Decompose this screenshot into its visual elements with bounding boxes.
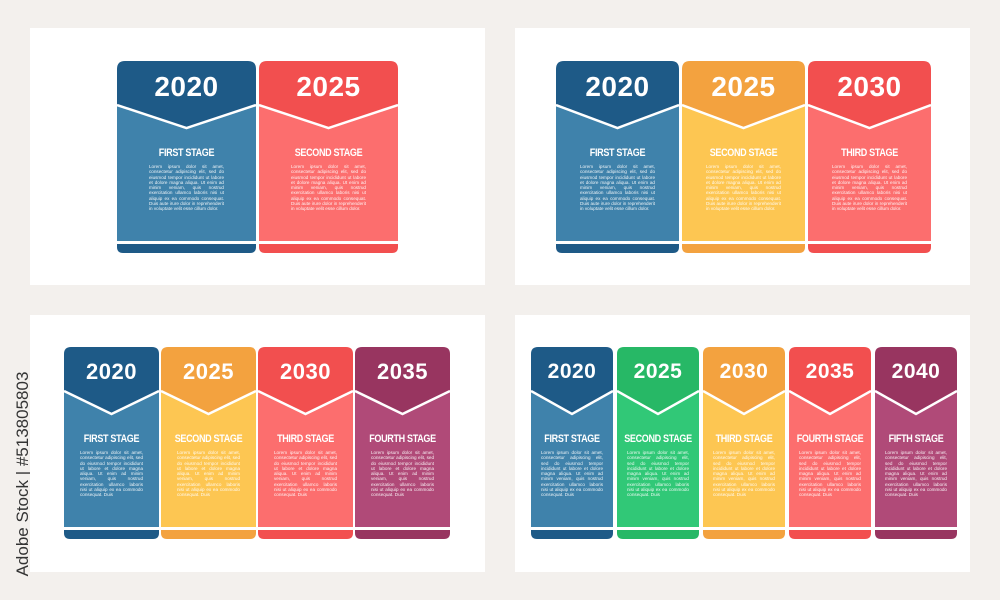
column: 2030 third stage: Lorem ipsum dolor sit amet, consectetur adipiscing elit, sed do eiusmod tempor incididunt ut labore et dolore magna aliqua. Ut enim ad minim veniam, quis nostrud exercitation ullamco laboris nisi ut aliquip ex ea commodo consequat. Duis [713,450,775,497]
column: 2020 first stage: 2020 [585,71,650,102]
column: 2025 second stage: Lorem ipsum dolor sit amet, consectetur adipiscing elit, sed do eiusmod tempor incididunt ut labore et dolore magna aliqua. Ut enim ad minim veniam, quis nostrud exercitation ullamco laboris nisi ut aliquip ex ea commodo consequat. Duis [627,450,689,497]
column: 2030 third stage: THIRD STAGE [841,147,898,159]
column: 2020 first stage: Lorem ipsum dolor sit amet, consectetur adipiscing elit, sed do eiusmod tempor incididunt ut labore et dolore magna aliqua. Ut enim ad minim veniam, quis nostrud exercitation ullamco laboris nisi ut aliquip ex ea commodo consequat. Duis [541,450,603,497]
column: 2020 first stage: FIRST STAGE [84,433,139,445]
column: 2025 second stage: 2025 [296,71,361,102]
column: 2030 third stage: THIRD STAGE [716,433,772,445]
column: 2020 first stage: 2020 [154,71,219,102]
column: 2025 second stage [259,61,398,253]
column: 2025 second stage [682,61,805,253]
column: 2035 fourth stage: FOURTH STAGE [369,433,436,445]
panel: three stages [515,28,970,285]
column: 2040 fifth stage: FIFTH STAGE [889,433,943,445]
column: 2025 second stage: 2025 [634,360,682,383]
column: 2030 third stage: THIRD STAGE [277,433,334,445]
column: 2020 first stage [64,347,159,539]
column: 2020 first stage: FIRST STAGE [544,433,600,445]
column: 2020 first stage: 2020 [548,360,596,383]
column: 2035 fourth stage: FOURTH STAGE [797,433,863,445]
column: 2025 second stage [161,347,256,539]
column: 2040 fifth stage [875,347,957,539]
panel: four stages [30,315,485,572]
column: 2030 third stage [703,347,785,539]
column: 2030 third stage: 2030 [837,71,902,102]
panel: five stages [515,315,970,572]
column: 2035 fourth stage: 2035 [806,360,854,383]
column: 2025 second stage: 2025 [183,359,234,384]
column: 2025 second stage: Lorem ipsum dolor sit amet, consectetur adipiscing elit, sed do eiusmod tempor incididunt ut labore et dolore magna aliqua. Ut enim ad minim veniam, quis nostrud exercitation ullamco laboris nisi ut aliquip ex ea commodo consequat. Duis [177,450,240,497]
watermark: vertical credit: Adobe Stock | #513805803 [13,372,32,576]
column: 2030 third stage: Lorem ipsum dolor sit amet, consectetur adipiscing elit, sed do eiusmod tempor incididunt ut labore et dolore magna aliqua. Ut enim ad minim veniam, quis nostrud exercitation ullamco laboris nisi ut aliquip ex ea commodo consequat. Duis [274,450,337,497]
column: 2035 fourth stage [355,347,450,539]
column: 2030 third stage: Lorem ipsum dolor sit amet, consectetur adipiscing elit, sed do eiusmod tempor incididunt ut labore et dolore magna aliqua. Ut enim ad minim veniam, quis nostrud exercitation ullamco laboris nisi ut aliquip ex ea commodo consequat. Duis aute irure dolor in reprehenderit in voluptate velit esse cillum dolor. [832,164,907,211]
column: 2030 third stage: 2030 [280,359,331,384]
column: 2035 fourth stage [789,347,871,539]
column: 2020 first stage: FIRST STAGE [590,147,645,159]
column: 2020 first stage: FIRST STAGE [159,147,214,159]
column: 2035 fourth stage: Lorem ipsum dolor sit amet, consectetur adipiscing elit, sed do eiusmod tempor incididunt ut labore et dolore magna aliqua. Ut enim ad minim veniam, quis nostrud exercitation ullamco laboris nisi ut aliquip ex ea commodo consequat. Duis [371,450,434,497]
column: 2020 first stage [117,61,256,253]
column: 2025 second stage: SECOND STAGE [710,147,777,159]
column: 2025 second stage: Lorem ipsum dolor sit amet, consectetur adipiscing elit, sed do eiusmod tempor incididunt ut labore et dolore magna aliqua. Ut enim ad minim veniam, quis nostrud exercitation ullamco laboris nisi ut aliquip ex ea commodo consequat. Duis aute irure dolor in reprehenderit in voluptate velit esse cillum dolor. [706,164,781,211]
column: 2035 fourth stage: Lorem ipsum dolor sit amet, consectetur adipiscing elit, sed do eiusmod tempor incididunt ut labore et dolore magna aliqua. Ut enim ad minim veniam, quis nostrud exercitation ullamco laboris nisi ut aliquip ex ea commodo consequat. Duis [799,450,861,497]
column: 2025 second stage: 2025 [711,71,776,102]
column: 2020 first stage: 2020 [86,359,137,384]
column: 2020 first stage: Lorem ipsum dolor sit amet, consectetur adipiscing elit, sed do eiusmod tempor incididunt ut labore et dolore magna aliqua. Ut enim ad minim veniam, quis nostrud exercitation ullamco laboris nisi ut aliquip ex ea commodo consequat. Duis aute irure dolor in reprehenderit in voluptate velit esse cillum dolor. [149,164,224,211]
column: 2025 second stage: SECOND STAGE [295,147,362,159]
panel: two stages [30,28,485,285]
column: 2035 fourth stage: 2035 [377,359,428,384]
column: 2030 third stage [258,347,353,539]
column: 2020 first stage: Lorem ipsum dolor sit amet, consectetur adipiscing elit, sed do eiusmod tempor incididunt ut labore et dolore magna aliqua. Ut enim ad minim veniam, quis nostrud exercitation ullamco laboris nisi ut aliquip ex ea commodo consequat. Duis [80,450,143,497]
column: 2040 fifth stage: Lorem ipsum dolor sit amet, consectetur adipiscing elit, sed do eiusmod tempor incididunt ut labore et dolore magna aliqua. Ut enim ad minim veniam, quis nostrud exercitation ullamco laboris nisi ut aliquip ex ea commodo consequat. Duis [885,450,947,497]
column: 2025 second stage: SECOND STAGE [175,433,242,445]
column: 2025 second stage: Lorem ipsum dolor sit amet, consectetur adipiscing elit, sed do eiusmod tempor incididunt ut labore et dolore magna aliqua. Ut enim ad minim veniam, quis nostrud exercitation ullamco laboris nisi ut aliquip ex ea commodo consequat. Duis aute irure dolor in reprehenderit in voluptate velit esse cillum dolor. [291,164,366,211]
column: 2020 first stage [531,347,613,539]
column: 2020 first stage [556,61,679,253]
column: 2025 second stage [617,347,699,539]
column: 2040 fifth stage: 2040 [892,360,940,383]
column: 2030 third stage [808,61,931,253]
column: 2025 second stage: SECOND STAGE [624,433,692,445]
column: 2020 first stage: Lorem ipsum dolor sit amet, consectetur adipiscing elit, sed do eiusmod tempor incididunt ut labore et dolore magna aliqua. Ut enim ad minim veniam, quis nostrud exercitation ullamco laboris nisi ut aliquip ex ea commodo consequat. Duis aute irure dolor in reprehenderit in voluptate velit esse cillum dolor. [580,164,655,211]
column: 2030 third stage: 2030 [720,360,768,383]
